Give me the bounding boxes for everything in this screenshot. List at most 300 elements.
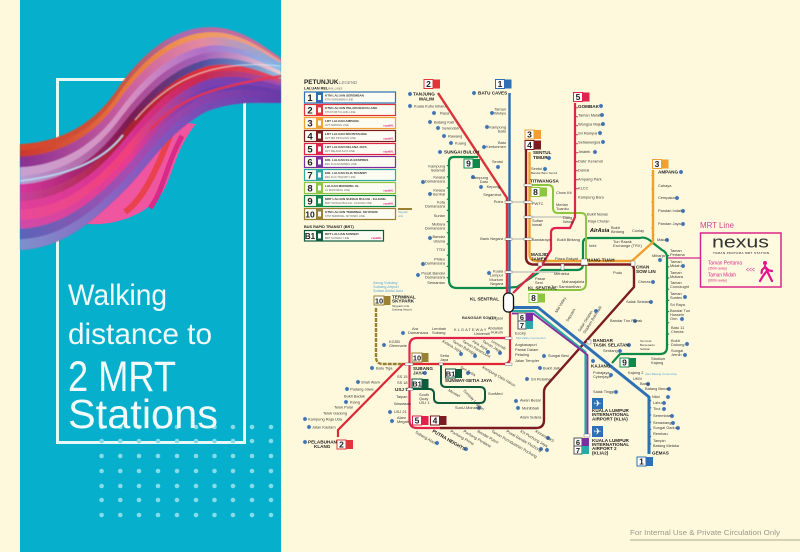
station names: regular: Batu (498, 128, 506, 134)
station names: regular: Taman Melati (578, 112, 601, 118)
station names: regular: Kampung Raja Uda (308, 416, 343, 422)
station names: regular: Putrajaya (593, 370, 610, 375)
walking links (508, 202, 570, 272)
legend: 10 (305, 210, 315, 220)
legend: 4 (307, 132, 313, 142)
station names: regular: Rawang (448, 134, 462, 138)
station names: regular: Utama (434, 238, 446, 244)
station names: regular: Seni (535, 280, 543, 285)
legend: BRT SUNWAY LINE (325, 236, 349, 240)
station names: regular: USJ 21 (394, 409, 407, 414)
station names: regular: Batang Kali (434, 120, 454, 124)
badges 3 and 4: 4 (527, 140, 532, 150)
legend: LRT KELANA JAYA LINE (325, 149, 355, 153)
legend: Link (398, 214, 404, 218)
badge 2 south: 2 (339, 440, 344, 450)
station names: regular: Ara (412, 326, 419, 331)
rotated station names (414, 296, 603, 459)
legend: LRT LALUAN SRI PETALING (325, 132, 367, 136)
station names: regular: Merdeka (554, 271, 570, 276)
legend: rapidKL (383, 188, 394, 192)
station names: regular: Taman (670, 259, 682, 264)
station names: regular: Jernih (671, 352, 682, 357)
station names: regular: Cheras (638, 279, 651, 284)
rotated station names: Bandar Puteri (476, 429, 500, 445)
station names: regular: Kwasa (433, 188, 446, 192)
station names: regular: Wawasan (394, 401, 411, 406)
station names: regular: Mid Valley Connection (516, 336, 546, 340)
station names: regular: Hussein (670, 312, 684, 317)
station names: interchanges: AIRPORT 2 (592, 446, 617, 451)
airport icons: ✈ (594, 398, 602, 408)
station names: interchanges: BATU CAVES (478, 90, 507, 96)
station names: regular: Tampin (653, 438, 666, 443)
station distances (708, 260, 755, 282)
station names: regular: Tiroi (653, 406, 661, 411)
station names: interchanges: SUNGAI BULOH (444, 150, 480, 154)
station names: regular: Bukit Nanas (587, 212, 608, 216)
legend: KTM PORT KLANG LINE (325, 110, 356, 114)
station names: regular: Ismail (532, 222, 542, 227)
rotated station names: Taman Jaya (482, 339, 503, 354)
rotated station names: Taman Paramount (462, 339, 492, 359)
station names: regular: Kajang 2 (628, 370, 643, 375)
station names: regular: Putra (494, 199, 504, 204)
station names: interchanges: (KLIA2) (592, 450, 609, 456)
station names: regular: Maluri (657, 237, 668, 242)
icon: walking person (760, 261, 772, 281)
station names: regular: Maharajalela (562, 279, 585, 284)
station names: regular: Kuala Kubu Bharu (414, 104, 446, 108)
station names: regular: Tuanku (556, 206, 569, 211)
legend: rapidKL (383, 202, 394, 206)
station names: regular: Jaya (440, 357, 449, 362)
station names: regular: Bangi (640, 381, 650, 386)
badge 9 Kajang: 9 (622, 358, 627, 368)
badge 2 south (337, 440, 353, 450)
station names: regular: Bukit (611, 225, 621, 230)
rotated station names: Mentari (448, 388, 461, 398)
station names: regular: Sri Raya (670, 302, 686, 307)
heading (68, 279, 218, 437)
station names: interchanges: AMPANG (658, 170, 679, 174)
station names: regular: Dato (480, 179, 488, 184)
rotated station names: Mid Valley (554, 296, 567, 314)
station names: interchanges: CHAN (636, 264, 650, 270)
station names: regular: Kota (437, 200, 446, 204)
badge 5 (574, 92, 590, 102)
legend: BRT LALUAN SUNWAY (325, 232, 360, 236)
station names: regular: Taman (670, 270, 682, 275)
station names: interchanges: MALIM (419, 96, 434, 102)
panel: teal cover (20, 0, 281, 552)
legend: KL MONORAIL LINE (325, 188, 350, 192)
station names: regular: Klang (350, 400, 360, 404)
ribbon pink lower lobe (66, 118, 196, 224)
station names: interchanges: GEMAS (652, 450, 669, 456)
connector (668, 257, 700, 259)
legend: LEGEND (339, 80, 358, 85)
MRT Line callout (668, 220, 781, 287)
station names: regular: SS 15 (397, 374, 408, 379)
station names: interchanges: TANJUNG (413, 92, 435, 96)
badges 3 and 4 (525, 130, 541, 150)
station names: interchanges: SKYPARK (392, 298, 415, 304)
legend: 3 (307, 118, 313, 130)
station names: regular: Sri Rampai (578, 130, 597, 136)
legend: Skypark (398, 210, 408, 214)
station names: regular: Sultan (532, 218, 543, 223)
station names: regular: Abdullah (488, 326, 503, 330)
badges 6 and 7 KL Sentral (518, 313, 533, 330)
station names: regular: Taman (670, 248, 682, 253)
badge 1 Gemas (637, 456, 653, 466)
station names: interchanges: KUALA LUMPUR (592, 408, 630, 413)
line 10 skypark (376, 308, 403, 364)
badge 8 north (531, 187, 547, 197)
badge 8 south (529, 293, 545, 303)
legend: LRT AMPANG LINE (325, 123, 349, 127)
badge 10 skypark: 10 (375, 296, 383, 306)
station names: regular: Phileo (434, 256, 445, 262)
white frame (58, 80, 244, 442)
station names: regular: Wangi (563, 219, 574, 224)
station names: regular: Kajang (651, 360, 663, 365)
station names: regular: Imbi (589, 243, 596, 248)
station names: interchanges: SUBANG (413, 366, 433, 371)
station names: regular: USJ 1 (419, 400, 430, 405)
line 1 seremban (508, 93, 511, 295)
station names: regular: Rasa (440, 110, 450, 116)
rotated station names: Subang Alam (414, 430, 437, 445)
legend: KTM LALUAN PELABUHAN KLANG (325, 106, 378, 110)
station names: regular: Dukung (671, 342, 684, 347)
heading: Stations (68, 391, 218, 437)
station names: regular: UKM (633, 376, 642, 381)
legend: 2 (307, 106, 313, 116)
interchange markers (405, 184, 635, 437)
legend: KTM LALUAN TERMINAL SKYPARK (325, 210, 379, 214)
station names: regular (308, 104, 690, 448)
nexus box (700, 233, 781, 287)
station names: regular: SS 18 (397, 380, 408, 385)
callout label: MRT Line (700, 220, 734, 230)
station names: regular: Bangsar (488, 316, 504, 320)
station names: regular: Cahaya (658, 183, 672, 188)
station names: interchanges: GOMBAK (578, 104, 600, 109)
station names: interchanges: TITIWANGSA (530, 178, 560, 184)
station names: regular: Bukit Bintang (557, 237, 580, 242)
station names: regular: Sungai Besi (548, 353, 569, 358)
station names: regular: Suntex (670, 295, 682, 300)
station distances: Taman Midah (708, 272, 736, 278)
station names: regular: Jalan Templer (515, 358, 540, 363)
line 5 kelana jaya (513, 103, 575, 293)
station names: regular: Petaling (515, 352, 529, 357)
dot pattern (99, 425, 273, 517)
legend: MRT LALUAN SUNGAI BULOH - KAJANG (325, 197, 386, 201)
legend: 1 (307, 93, 313, 104)
station names: regular: Conlay (632, 228, 644, 233)
station names: interchanges: KL SENTRAL (470, 296, 499, 302)
station names: regular: Hukum (491, 330, 503, 334)
station names: regular: Chow Kit (556, 190, 572, 195)
badges 5 and 4 Putra Heights: 5 (415, 416, 420, 426)
station names: regular: Tun Sambanthan (551, 284, 581, 289)
legend: rapidKL (383, 136, 394, 140)
station names: regular: Stadium (651, 356, 665, 361)
station names: regular: Mutiara (432, 222, 446, 226)
legend: rapidKL (383, 150, 394, 154)
station names: interchanges (308, 90, 679, 456)
rotated station names: Puchong Prima (450, 429, 476, 447)
station names: regular: Skypark Link (392, 304, 410, 308)
badge B1 sunway: B1 (446, 370, 455, 378)
rotated station names: Kinrara BK5 (534, 429, 555, 443)
badges 6 and 7 KLIA (574, 438, 589, 455)
badge B1 USJ: B1 (412, 380, 422, 388)
legend: 5 (307, 144, 313, 156)
legend: MRT SUNGAI BULOH - KAJANG LINE (325, 201, 372, 205)
BRT sunway (409, 364, 485, 403)
station names: regular: Padang Jawa (350, 386, 374, 392)
station names: regular: Midah (670, 263, 681, 268)
station names: regular: Bukit Badak (344, 394, 365, 398)
station names: regular: Bukit (671, 338, 681, 343)
station names: regular: Kampung (428, 164, 445, 168)
rotated station names: Pusat Bandar Puchong (506, 429, 543, 453)
legend: B1 (305, 232, 316, 241)
legend: 6 (307, 158, 313, 168)
station names: regular: KGSB (389, 339, 400, 344)
station names: regular: Negara (490, 281, 504, 286)
station names: regular: Pudu (613, 270, 622, 275)
station names: regular: Wahyu (494, 110, 506, 116)
station names: regular: SunMed (488, 391, 502, 396)
legend: rapidKL (383, 124, 394, 128)
station names: interchanges: JAMEK (531, 256, 548, 262)
station names: regular: Terminal (640, 339, 652, 343)
station names: interchanges: SENTUL (533, 150, 552, 155)
station names: regular: Segambut (483, 192, 502, 197)
station names: regular: Taman (670, 291, 682, 296)
station names: regular: Labu (653, 400, 662, 405)
line 4 sri petaling (440, 150, 634, 428)
station names: regular: Selatan (640, 347, 651, 351)
station names: regular: Setiawangsa (578, 140, 601, 144)
station names: regular: Medan (556, 202, 568, 207)
airport icons: ✈ (594, 426, 602, 436)
station names: regular: Salak Tinggi (593, 389, 614, 394)
station names: interchanges: KL SENTRAL (528, 286, 557, 290)
station names: regular: Quay (419, 396, 428, 401)
badges 6 and 7 KLIA: 7 (576, 446, 580, 455)
station names: regular: Jalan Kastam (312, 424, 336, 430)
station names: regular: Kampung (489, 124, 506, 130)
station names: interchanges: MASJID (531, 252, 549, 257)
station distances: (800m away) (708, 278, 727, 282)
station names: interchanges: KLANG (314, 444, 331, 449)
legend: LALUAN REL (304, 86, 329, 90)
badge 5: 5 (576, 92, 581, 102)
station names: interchanges: KAJANG (591, 364, 611, 368)
station names: regular: Tun Razak (613, 239, 632, 244)
station names: regular: Along Subang (373, 280, 397, 285)
legend: ERL LALUAN KLIA TRANSIT (325, 171, 367, 175)
rotated station names: Universiti (490, 339, 507, 351)
station names: regular: Taman (670, 280, 682, 285)
badges 3 and 4: 3 (527, 130, 532, 140)
station names: regular: Bandar (432, 234, 446, 239)
rotated station names: Seri Setia (460, 365, 477, 378)
badge 2 top: 2 (426, 79, 431, 89)
station names: interchanges: BANDAR (593, 338, 614, 343)
station names: regular: Megah (397, 419, 409, 424)
station names: regular: Exchange (TRX) (613, 243, 642, 248)
station names: regular: Wangsa Maju (578, 122, 602, 126)
station names: interchanges: HANG TUAH (587, 258, 615, 262)
station names: interchanges: TIMUR (533, 155, 548, 160)
station names: regular: Kepong (487, 184, 500, 189)
station dots (303, 91, 689, 452)
legend: 7 (307, 170, 313, 182)
station names: regular: KLCC (578, 186, 589, 190)
station names: regular: Batu 11 (671, 325, 684, 330)
station names: regular: Teluk Gadong (323, 410, 347, 416)
station names: regular: Muhibbah (522, 406, 539, 410)
station names: regular: Sentul (492, 159, 503, 164)
station names: regular: Serdang (603, 348, 618, 353)
rotated station names: Seputeh (565, 308, 577, 323)
station names: regular: Kentonmen (486, 144, 506, 149)
lines 6 and 7 (512, 311, 586, 435)
legend: BUS RAPID TRANSIT (BRT) (304, 225, 355, 229)
badges 5 and 4 Putra Heights (412, 416, 446, 426)
legend: KTM TERMINAL SKYPARK LINE (325, 214, 365, 218)
station names: regular: Damansara (425, 260, 446, 266)
legend: RAIL LINES (328, 86, 343, 90)
legend: LALUAN MONOREL KL (325, 184, 359, 188)
badge 9 north: 9 (466, 158, 471, 168)
airport icons (592, 398, 603, 437)
station names: regular: Setia (440, 353, 450, 358)
station names: interchanges: INTERNATIONAL (592, 442, 629, 447)
station names: interchanges: SUNWAY-SETIA JAYA (445, 378, 493, 383)
station names: regular: Cheras (671, 329, 684, 334)
legend: KTM LALUAN SEREMBAN (325, 94, 365, 98)
station names: regular: Seremban (653, 413, 671, 418)
station names: regular: Jelatek (578, 149, 590, 154)
station distances: (350m away) (708, 266, 727, 270)
station names: regular: Damansara (425, 204, 446, 208)
station names: interchanges: AIRPORT (KLIA) (592, 416, 628, 422)
station ticks (576, 107, 578, 197)
badge B1 sunway (446, 369, 462, 378)
station names: regular: Angkasapuri (515, 342, 537, 347)
rotated station names: IOI Puchong Jaya (520, 429, 550, 449)
line number badges (337, 79, 668, 466)
rotated station names: Stadium Bukit Jalil (582, 305, 603, 335)
station names: regular: Subang (432, 330, 445, 335)
rotated station names: Kampung Dato Harun (482, 365, 517, 388)
station names: regular: KLGATEWAY (454, 327, 487, 332)
badge 8 north: 8 (533, 187, 538, 197)
legend: PETUNJUK (304, 79, 339, 86)
badge 9 Kajang (620, 358, 636, 368)
line 3 ampang (530, 152, 653, 261)
station names: regular: BANGSAR SOUTH (462, 315, 497, 320)
badge 1 Gemas: 1 (639, 456, 644, 466)
badge 9 north (464, 158, 480, 168)
station names: regular: SunU-Monash (455, 405, 480, 410)
station names: regular: Pertama (670, 252, 686, 257)
station names: regular: Cempaka (658, 195, 675, 200)
station names: interchanges: SOW LIN (636, 269, 656, 274)
station names: regular: Serendah (442, 126, 459, 130)
station names: regular: Miharja (652, 253, 666, 258)
heading: distance to (68, 318, 212, 351)
station names: regular: Bandar Baru Sentul (531, 171, 558, 175)
legend (304, 79, 412, 241)
badge 10 subang (412, 353, 428, 362)
station names: regular: Bintang (611, 229, 624, 234)
badge 1 top: 1 (498, 79, 503, 89)
station names: regular: Dang (563, 215, 572, 220)
station names: regular: Pantai Dalam (515, 347, 538, 352)
line 2 port klang (438, 93, 507, 295)
station names: interchanges: USJ 7 (395, 387, 408, 392)
station names: interchanges: INTERNATIONAL (592, 412, 629, 417)
station names: regular: Sentul (531, 166, 542, 171)
station names: regular: Taman (494, 106, 506, 112)
station names: regular: Teluk Pulai (334, 404, 353, 410)
legend: ERL KLIA TRANSIT LINE (325, 175, 356, 179)
station names: regular: Kwasa (433, 174, 446, 180)
rotated station names: Kelana Jaya (442, 339, 463, 354)
station names: interchanges: PELABUHAN (308, 440, 338, 444)
station names: regular: Batu Tiga (376, 366, 393, 370)
station names: regular: Onn (670, 316, 677, 321)
station names: interchanges: KUALA LUMPUR (592, 438, 630, 443)
legend: LRT LALUAN AMPANG (325, 119, 359, 123)
station names: regular: PWTC (532, 201, 544, 206)
badge 10 subang: 10 (413, 354, 421, 362)
station distances: <<< (746, 267, 755, 274)
rotated station names: Sunway Lagoon (462, 388, 486, 411)
legend: LRT LALUAN KELANA JAYA (325, 145, 368, 149)
station names: regular: Lumpur (490, 272, 504, 278)
station names: regular: Kampung Baru (578, 194, 604, 200)
station names: regular: Bandaraya (532, 237, 552, 242)
station names: regular: South (419, 392, 429, 397)
rail lines (338, 93, 668, 454)
panel: rail transit map (303, 79, 690, 466)
heading: 2 MRT (68, 353, 176, 401)
station names: regular: Pasar (535, 276, 546, 281)
station names: regular: Mutiara (670, 274, 684, 279)
MRT Line callout: TAMAN PERTAMA MRT STATION (713, 251, 769, 255)
station names: regular: Pusat Bandar (421, 270, 446, 276)
station names: regular: Senawang (653, 420, 671, 425)
line 9 MRT (449, 157, 667, 363)
station names: interchanges: TASIK SELATAN (593, 342, 629, 348)
station names: regular: Subang Airport (373, 284, 400, 289)
station names: regular: Bukit Jalil (543, 366, 560, 370)
legend: 9 (307, 196, 313, 208)
station names: regular: Universiti (474, 331, 490, 336)
rotated station names: Taman Perindustrian Puchong (490, 429, 538, 459)
station names: regular: Rembau (653, 431, 668, 436)
